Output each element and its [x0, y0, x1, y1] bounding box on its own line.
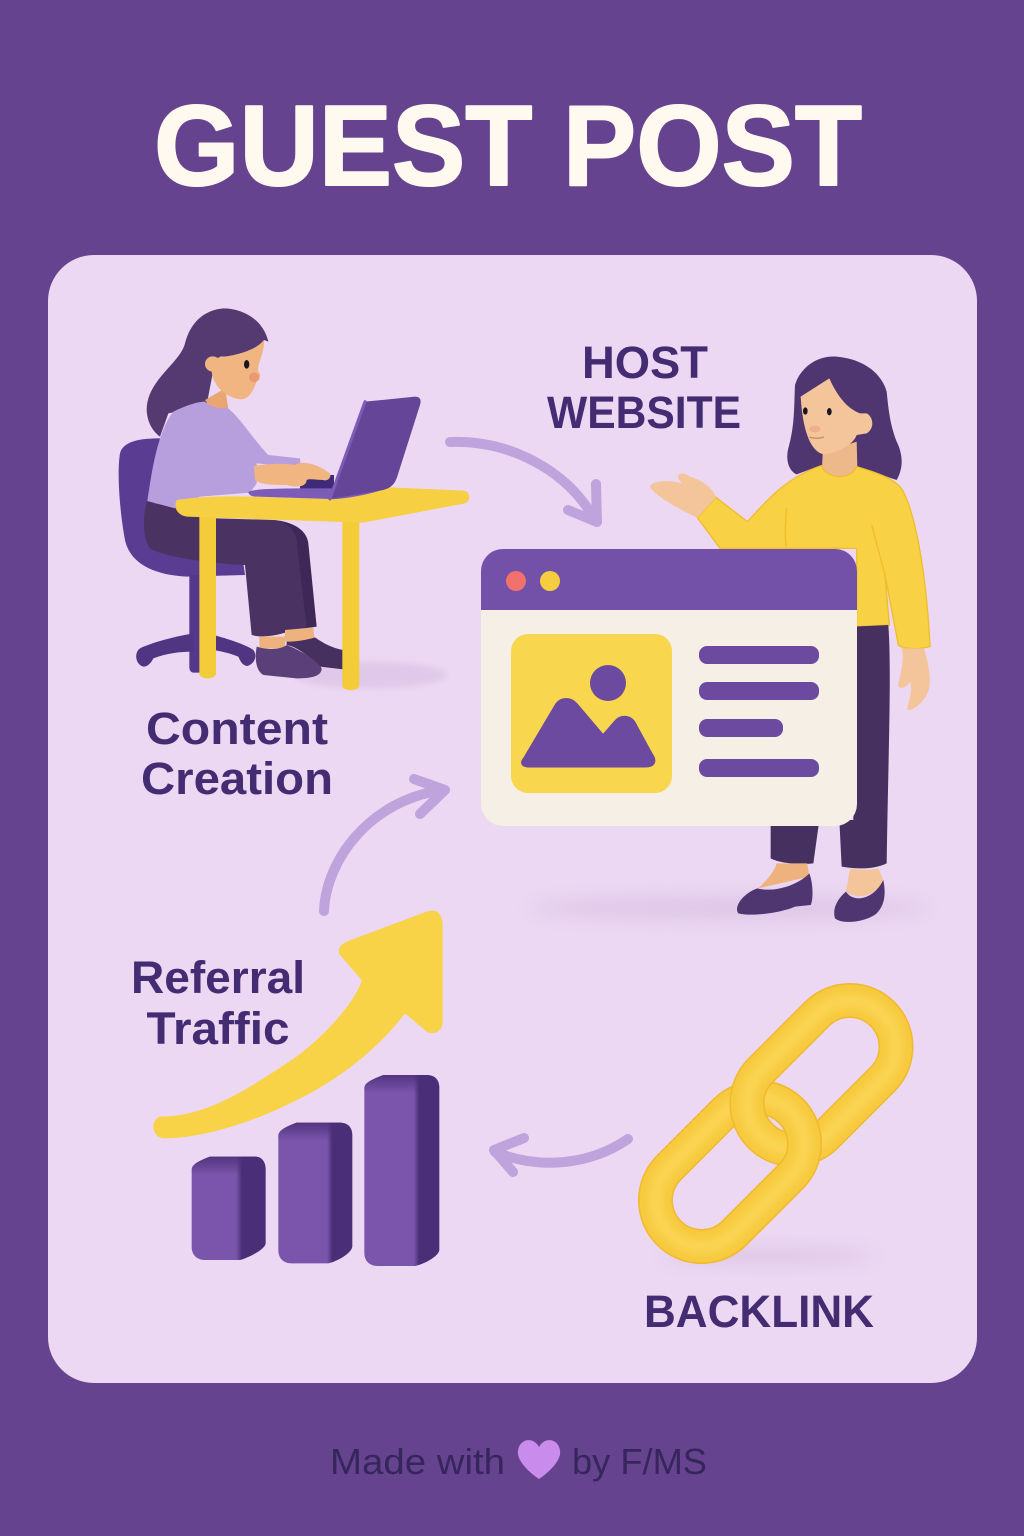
growth arrow [153, 911, 443, 1138]
face [205, 340, 264, 399]
browser window [481, 549, 857, 826]
floor shadow [293, 662, 447, 688]
link shadow [665, 1249, 875, 1263]
window body [481, 549, 857, 826]
shoes [287, 637, 343, 669]
panel: main card [48, 255, 977, 1383]
text lines [699, 646, 819, 664]
label: content creation: Creation [141, 753, 333, 804]
illustration: host person [530, 357, 930, 922]
footer text left: Made with [330, 1441, 505, 1482]
floor shadow [530, 896, 930, 920]
label: referral traffic: Traffic [146, 1003, 290, 1054]
upper link [728, 981, 915, 1169]
ankles [758, 863, 809, 888]
label: host website: WEBSITE [547, 387, 741, 438]
window title bar [481, 549, 857, 610]
footer: made with love [330, 1440, 707, 1482]
shoes [737, 873, 813, 915]
hands [254, 463, 330, 487]
desk legs [199, 515, 359, 690]
sweater [147, 402, 301, 508]
lower link front overlap [664, 1082, 822, 1264]
chair [119, 438, 255, 673]
tall bar [364, 1075, 439, 1266]
upper body [650, 357, 930, 649]
neck [205, 388, 228, 410]
open hand [650, 474, 716, 518]
desk top [175, 487, 469, 523]
keyboard [300, 475, 334, 490]
label: backlink: BACKLINK [644, 1286, 874, 1337]
hair [787, 357, 902, 480]
arrow: content to website [450, 442, 597, 522]
legs [273, 520, 317, 630]
face [801, 378, 872, 454]
hair [147, 308, 268, 437]
lower body [737, 625, 930, 922]
label: referral traffic: Referral [131, 952, 305, 1003]
neck [822, 442, 857, 479]
yellow button [540, 571, 560, 591]
lower link [636, 1078, 824, 1266]
illustration: person at desk [119, 308, 469, 690]
laptop [248, 397, 421, 499]
growth arrow and bars [153, 911, 443, 1266]
small bar [192, 1157, 266, 1260]
arrow: traffic to website [324, 779, 445, 911]
footer text right: by F/MS [572, 1441, 707, 1482]
icon: heart [518, 1440, 560, 1479]
ankles [259, 627, 315, 648]
trousers [839, 625, 890, 868]
sweater [697, 466, 930, 649]
arrow: backlink to traffic [494, 1138, 628, 1172]
label: host website: HOST [582, 337, 708, 388]
label: content creation: Content [146, 703, 328, 754]
middle bar [278, 1123, 352, 1263]
right hand [898, 648, 930, 710]
sun [590, 665, 626, 701]
sleeve seam [785, 508, 885, 575]
title: GUEST POST [154, 83, 862, 210]
mountains [525, 702, 652, 764]
red button [506, 571, 526, 591]
image placeholder [511, 634, 672, 793]
bar chart [192, 1075, 439, 1266]
icon: chain link [636, 981, 915, 1266]
